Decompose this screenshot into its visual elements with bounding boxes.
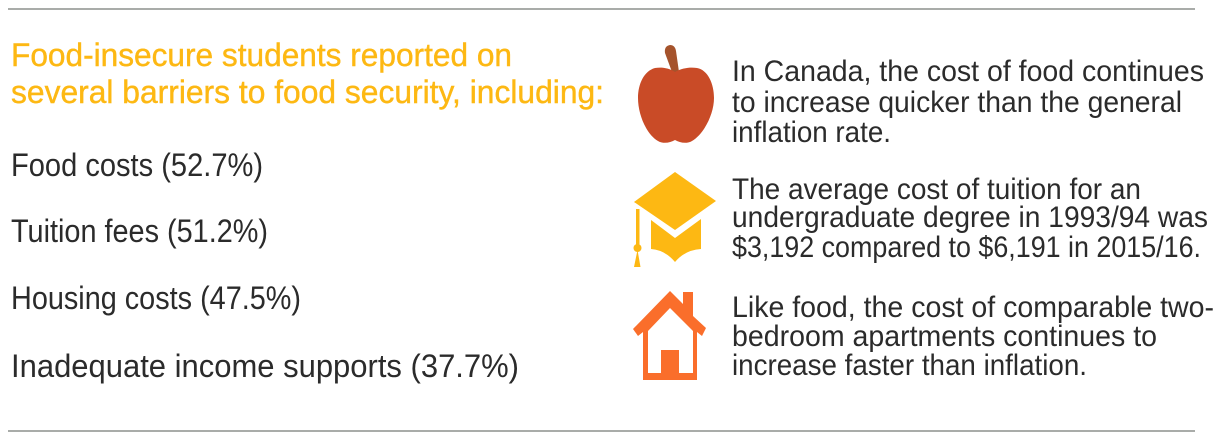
text: tuition cost: The average cost of tuition for an [732,173,1141,206]
icon: apple [638,45,714,143]
barrier: housing costs: Housing costs (47.5%) [11,280,301,316]
text: food cost: to increase quicker than the general [732,86,1182,119]
text: food cost [732,55,1204,149]
heading: several barriers to food security, including: [11,74,604,110]
text: food cost: inflation rate. [732,116,891,149]
list of barriers [11,147,519,384]
heading [11,37,604,110]
text: housing cost [732,291,1214,382]
text: housing cost: bedroom apartments continues to [732,320,1157,353]
barrier: tuition fees: Tuition fees (51.2%) [11,213,268,249]
barrier: inadequate income supports: Inadequate income supports (37.7%) [11,348,519,384]
heading: Food-insecure students reported on [11,37,512,73]
icon: house [633,291,706,380]
barrier: food costs: Food costs (52.7%) [11,147,263,183]
text: housing cost: increase faster than inflation. [732,349,1087,382]
text: food cost: In Canada, the cost of food continues [732,55,1204,88]
icon: graduation cap [634,172,716,267]
text: tuition cost [732,173,1208,264]
